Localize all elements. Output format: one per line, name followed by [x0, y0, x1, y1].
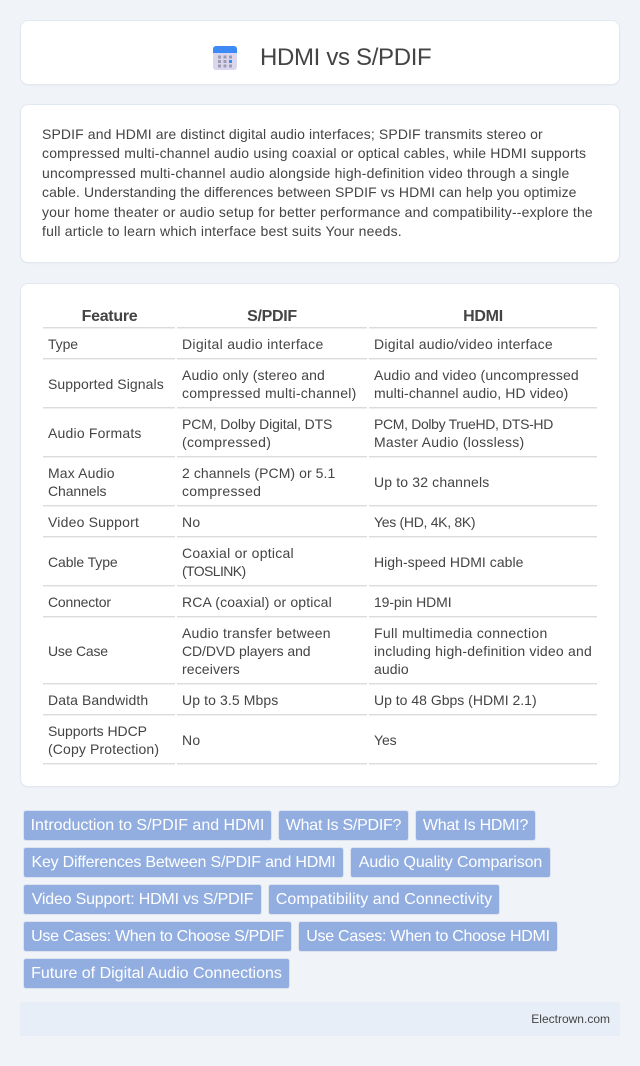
row: use case: Use Case	[48, 643, 108, 659]
tag	[23, 921, 292, 952]
tag	[278, 810, 409, 841]
row: supported signals: Audio only (stereo and	[182, 367, 325, 383]
row: supported signals	[48, 367, 579, 401]
row: supported signals: Audio and video (uncompressed	[374, 367, 579, 383]
footer bar	[20, 1002, 620, 1036]
text block: introduction: cable. Understanding the differences between SPDIF vs HDMI can help you optimize	[42, 184, 577, 200]
text block: introduction: uncompressed multi-channel audio alongside high-definition video through a single	[42, 165, 569, 181]
row: use case: Full multimedia connection	[374, 625, 548, 641]
tag: Use Cases: When to Choose HDMI	[306, 928, 550, 945]
text block: introduction	[42, 126, 593, 239]
row: cable type: (TOSLINK)	[182, 563, 246, 579]
row: max audio channels: Channels	[48, 483, 106, 499]
row: cable type: Cable Type	[48, 554, 118, 570]
row: connector: RCA (coaxial) or optical	[182, 594, 332, 610]
tag list	[23, 810, 558, 989]
text block: introduction: full article to learn which interface best suits Your needs.	[42, 223, 402, 239]
tag: What Is S/PDIF?	[286, 817, 401, 834]
tag: Compatibility and Connectivity	[276, 891, 492, 908]
row: data bandwidth: Up to 3.5 Mbps	[182, 692, 278, 708]
row: audio formats: PCM, Dolby TrueHD, DTS-HD	[374, 416, 553, 432]
tag	[23, 810, 272, 841]
row: cable type	[48, 545, 523, 579]
row: audio formats: Audio Formats	[48, 425, 142, 441]
panel: comparison table	[20, 283, 620, 787]
icon: calendar	[213, 46, 237, 70]
tag: What Is HDMI?	[423, 817, 528, 834]
row: supports hdcp	[48, 723, 397, 757]
row: connector: 19-pin HDMI	[374, 594, 451, 610]
row: type: Digital audio/video interface	[374, 336, 553, 352]
tag: Key Differences Between S/PDIF and HDMI	[31, 854, 336, 871]
table header: Feature	[82, 308, 137, 325]
tag	[23, 847, 344, 878]
tag	[350, 847, 551, 878]
row: use case: CD/DVD players and	[182, 643, 310, 659]
tag: Video Support: HDMI vs S/PDIF	[32, 891, 253, 908]
row: use case: Audio transfer between	[182, 625, 331, 641]
row: supports hdcp: Yes	[374, 732, 397, 748]
tag: Audio Quality Comparison	[359, 854, 542, 871]
row: supports hdcp: Supports HDCP	[48, 723, 147, 739]
row: data bandwidth	[48, 692, 537, 708]
row: supported signals: compressed multi-channel)	[182, 385, 357, 401]
row: supported signals: multi-channel audio, HD video)	[374, 385, 568, 401]
row: video support: Yes (HD, 4K, 8K)	[374, 514, 475, 530]
row: use case: audio	[374, 661, 409, 677]
row: audio formats: PCM, Dolby Digital, DTS	[182, 416, 332, 432]
row: connector	[48, 594, 451, 610]
title card	[20, 20, 620, 85]
heading: HDMI vs S/PDIF	[260, 44, 431, 71]
table header: S/PDIF	[247, 308, 297, 325]
row: use case	[48, 625, 592, 677]
row: cable type: High-speed HDMI cable	[374, 554, 523, 570]
tag: Future of Digital Audio Connections	[31, 965, 282, 982]
row: data bandwidth: Data Bandwidth	[48, 692, 148, 708]
row: data bandwidth: Up to 48 Gbps (HDMI 2.1)	[374, 692, 537, 708]
row: cable type: Coaxial or optical	[182, 545, 294, 561]
row: supports hdcp: No	[182, 732, 200, 748]
text block: introduction: SPDIF and HDMI are distinct digital audio interfaces; SPDIF transmits stereo or	[42, 126, 543, 142]
row: supported signals: Supported Signals	[48, 376, 164, 392]
row: connector: Connector	[48, 594, 111, 610]
row: max audio channels: 2 channels (PCM) or 5.1	[182, 465, 335, 481]
tag	[415, 810, 536, 841]
footer credit: Electrown.com	[531, 1012, 610, 1026]
row: video support: Video Support	[48, 514, 139, 530]
row: audio formats: (compressed)	[182, 434, 271, 450]
row: use case: including high-definition video and	[374, 643, 592, 659]
row: audio formats: Master Audio (lossless)	[374, 434, 524, 450]
row: max audio channels: compressed	[182, 483, 261, 499]
row: video support	[48, 514, 475, 530]
panel: introduction	[20, 104, 620, 263]
tag	[23, 958, 290, 989]
text block: introduction: your home theater or audio setup for better performance and compatibility--explore the	[42, 204, 593, 220]
row: max audio channels	[48, 465, 489, 499]
row: type: Type	[48, 336, 78, 352]
row: supports hdcp: (Copy Protection)	[48, 741, 159, 757]
table header	[82, 308, 503, 325]
row: type	[48, 336, 553, 352]
tag	[268, 884, 500, 915]
text block: introduction: compressed multi-channel audio using coaxial or optical cables, while HDMI supports	[42, 145, 586, 161]
row: use case: receivers	[182, 661, 240, 677]
row: video support: No	[182, 514, 200, 530]
tag	[23, 884, 262, 915]
row: max audio channels: Up to 32 channels	[374, 474, 489, 490]
tag: Introduction to S/PDIF and HDMI	[31, 817, 264, 834]
row: max audio channels: Max Audio	[48, 465, 115, 481]
tag	[298, 921, 558, 952]
row: type: Digital audio interface	[182, 336, 324, 352]
tag: Use Cases: When to Choose S/PDIF	[31, 928, 284, 945]
row: audio formats	[48, 416, 553, 450]
table header: HDMI	[463, 308, 503, 325]
